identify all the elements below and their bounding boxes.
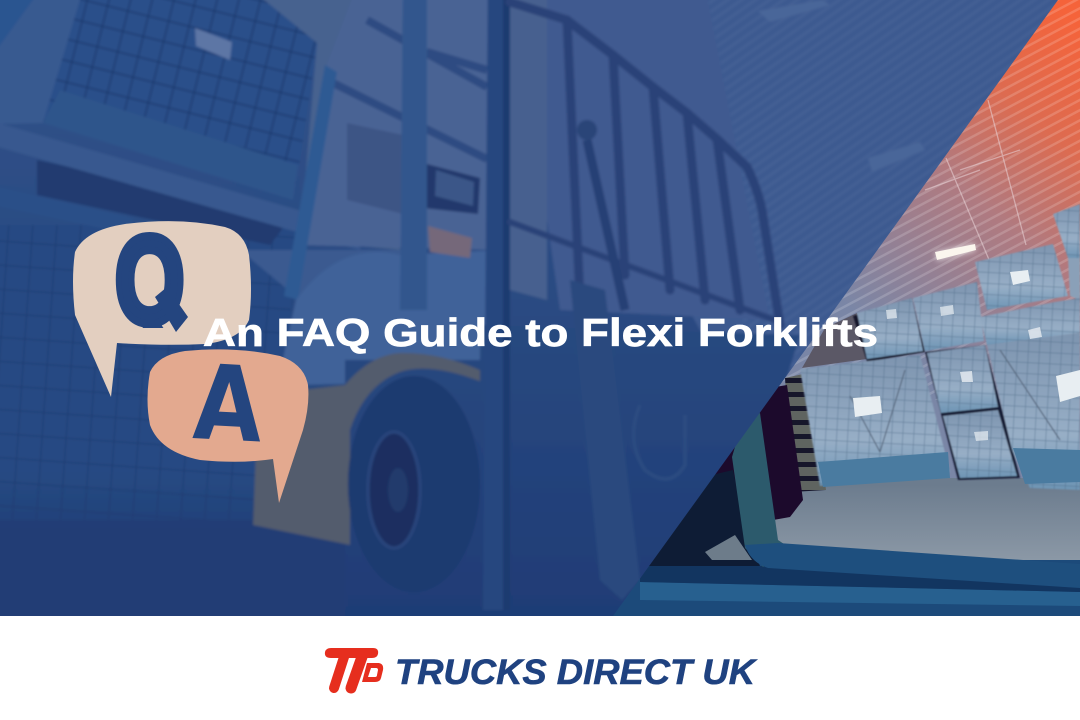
carriage dark lower: [479, 325, 800, 416]
guard post: [284, 65, 337, 300]
carriage frame bars: [510, 2, 780, 325]
brown stack behind crates: [802, 313, 867, 368]
warehouse photo: right side: [600, 0, 1080, 616]
left mast post: [400, 0, 427, 310]
racking at left: [785, 372, 826, 492]
floor: [775, 478, 1080, 560]
indicator lamp: [428, 226, 472, 258]
crate bases: [818, 448, 1080, 487]
main mast: [484, 0, 502, 610]
cab body: [280, 250, 500, 385]
fork front wheel: [649, 470, 760, 566]
hood lower dark: [344, 360, 480, 384]
logo mark: [325, 648, 383, 688]
ceiling light: [935, 243, 976, 261]
letter A: A: [191, 342, 266, 466]
headlamp: [423, 163, 480, 214]
fork upright: [732, 413, 783, 567]
yellow body tinted: [253, 353, 482, 545]
forklift tyre: [347, 376, 480, 546]
logo footer: [325, 648, 758, 692]
hose detail: [634, 405, 685, 479]
overhead guard bars: [333, 20, 487, 159]
letter Q: Q: [115, 211, 184, 349]
upper right wall behind cage: [264, 0, 400, 250]
Q tail: [155, 287, 188, 332]
floor under wheel: [705, 535, 752, 560]
blue base: [0, 44, 700, 556]
foreground floor: [600, 560, 1080, 616]
background behind forklift: [300, 0, 500, 250]
lower beam: [104, 226, 106, 228]
mast and carriage backdrop: [547, 52, 692, 316]
shadow under shelf: [37, 160, 293, 245]
fork shank: [570, 280, 640, 600]
logo wordmark: TRUCKS DIRECT UK: [395, 653, 758, 692]
dark forklift machinery: [716, 385, 803, 520]
chain and pulley: [577, 120, 625, 310]
ceiling with stripes: [694, 0, 1058, 374]
crate labels: [853, 270, 1080, 441]
stacked wire crates: [800, 204, 1080, 490]
shelf beam: [0, 112, 360, 250]
upper wire cage on shelf: [60, 0, 316, 160]
lower wire cage: [0, 240, 270, 487]
speech bubble: question: [73, 211, 251, 397]
ceiling: [778, 0, 1080, 478]
floor: [0, 470, 620, 660]
fork blade: [745, 543, 1080, 588]
speech bubble: answer: [148, 342, 308, 503]
title: An FAQ Guide to Flexi Forklifts: [203, 312, 878, 355]
left wall panel: [0, 0, 62, 120]
